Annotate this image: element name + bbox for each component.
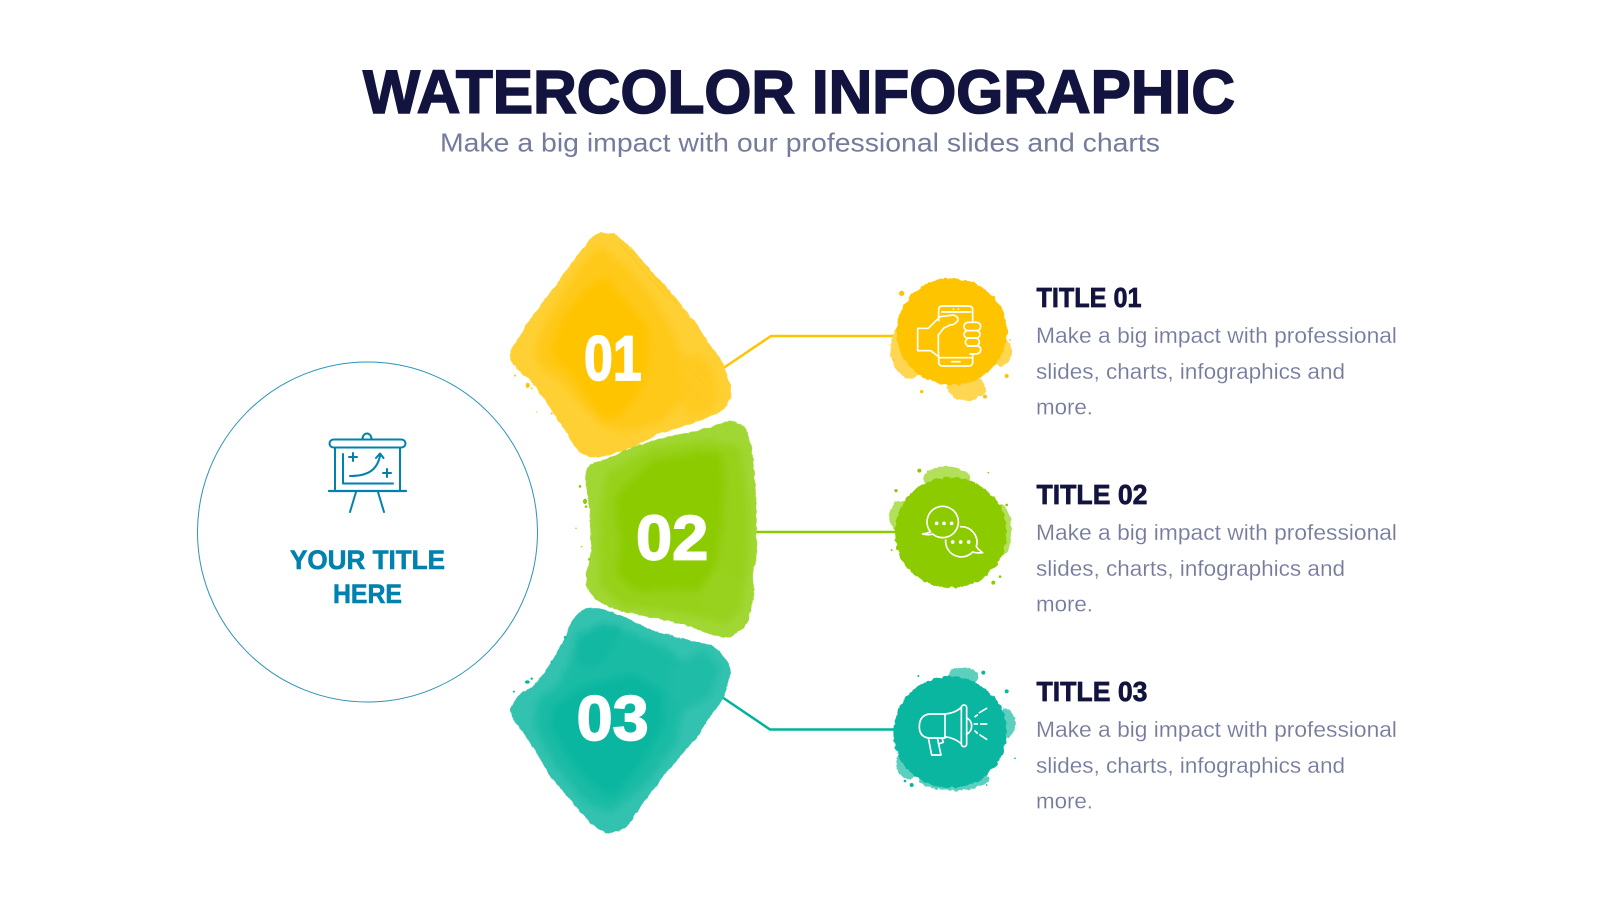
splash badge 01 <box>891 278 1012 400</box>
heading 01: TITLE 01 <box>1036 282 1142 313</box>
text block 02 <box>1036 520 1397 616</box>
icon: megaphone <box>919 705 987 755</box>
brush shape 02 <box>575 420 757 639</box>
chat dots <box>935 521 970 544</box>
text block 01: more. <box>1036 394 1093 420</box>
brush hatch 01 <box>620 243 713 410</box>
text block 03: more. <box>1036 788 1093 814</box>
text block 02: slides, charts, infographics and <box>1036 556 1345 581</box>
title: WATERCOLOR INFOGRAPHIC <box>363 58 1235 126</box>
circle heading: HERE <box>333 579 402 609</box>
circle heading: YOUR TITLE <box>290 545 445 575</box>
connector: 03 <box>713 691 895 730</box>
brush shape 03 <box>509 608 732 834</box>
text block 01: slides, charts, infographics and <box>1036 359 1345 384</box>
text block 01: Make a big impact with professional <box>1036 323 1397 348</box>
circle outline <box>198 362 538 702</box>
subtitle: Make a big impact with our professional slides and charts <box>440 128 1160 158</box>
splatter <box>575 485 591 561</box>
splash badge 03 <box>893 667 1016 790</box>
panel: item 03 <box>893 667 1397 814</box>
splash badge 02 <box>890 466 1012 588</box>
connector: 02 <box>713 531 895 533</box>
brush shape 01 <box>509 233 733 458</box>
splatter <box>513 636 566 693</box>
text block 02: more. <box>1036 592 1093 616</box>
panel: item 01 <box>891 278 1397 420</box>
panel: central circle <box>198 362 538 702</box>
splatter <box>514 375 553 414</box>
text block 03 <box>1036 717 1397 814</box>
text block 02: Make a big impact with professional <box>1036 520 1397 545</box>
icon: hand holding phone <box>918 306 981 366</box>
number 03: 03 <box>577 684 649 754</box>
panel: item 02 <box>890 466 1397 616</box>
text block 01 <box>1036 323 1397 420</box>
number 02: 02 <box>636 503 708 573</box>
heading 03: TITLE 03 <box>1036 676 1148 707</box>
heading 02: TITLE 02 <box>1036 479 1148 510</box>
text block 03: slides, charts, infographics and <box>1036 753 1345 778</box>
icon: presentation board <box>329 434 406 512</box>
icon: chat bubbles <box>923 506 983 557</box>
circle heading <box>290 545 445 609</box>
connector: 01 <box>722 336 895 369</box>
text block 03: Make a big impact with professional <box>1036 717 1397 742</box>
number 01: 01 <box>584 324 642 394</box>
